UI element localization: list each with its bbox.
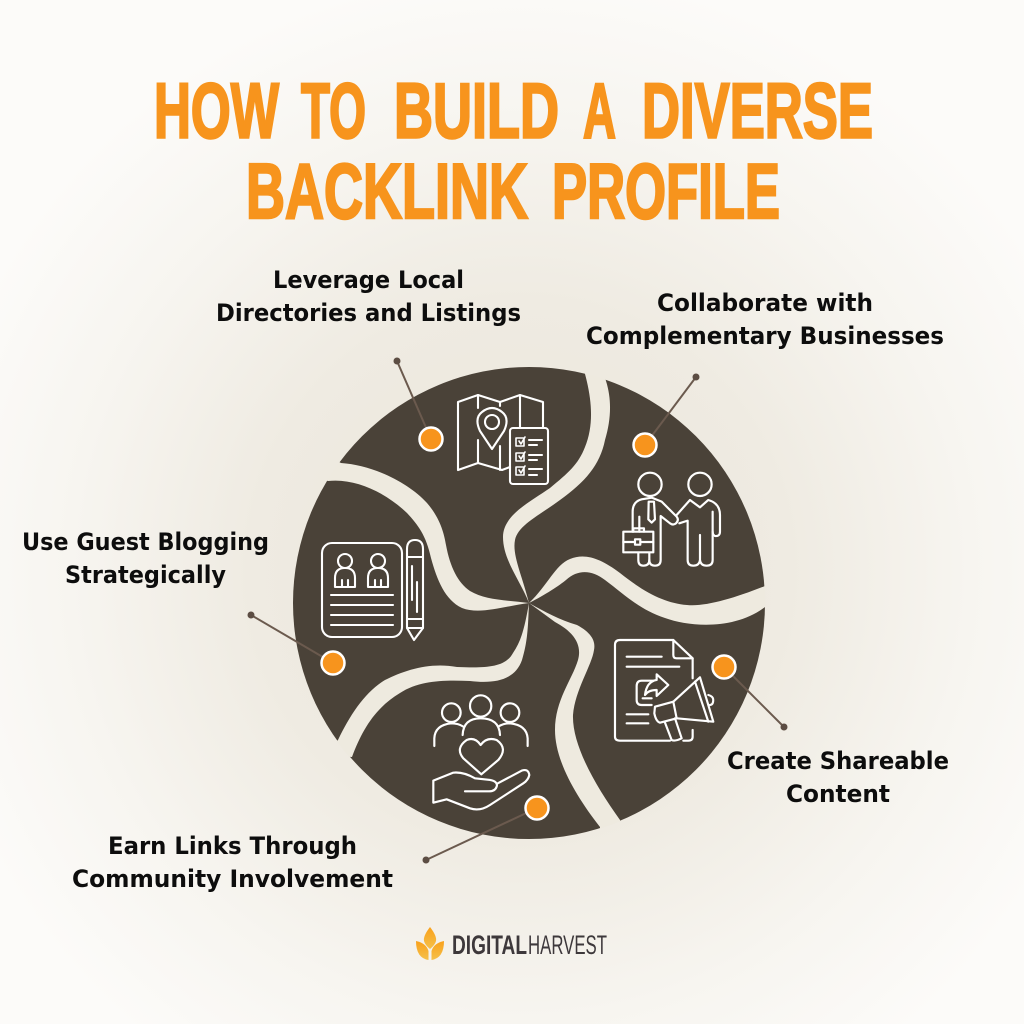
logo: Digital Harvest: DIGITAL <box>452 930 527 960</box>
callout: shareable content: Content <box>786 780 890 808</box>
callout: local directories: Leverage Local <box>273 266 464 294</box>
logo: Digital Harvest <box>416 927 607 960</box>
title <box>154 66 873 235</box>
callout: complementary businesses: Collaborate with <box>657 289 873 317</box>
callout: local directories <box>216 266 521 450</box>
icon: business handshake <box>623 473 720 566</box>
swirl circle diagram <box>293 360 780 845</box>
title: PROFILE <box>552 147 780 235</box>
callout: community involvement <box>72 796 548 893</box>
title: DIVERSE <box>642 66 873 154</box>
icon: document and megaphone <box>615 640 713 741</box>
callout: guest blogging <box>22 528 344 674</box>
logo: Digital Harvest: HARVEST <box>528 930 607 960</box>
icon: community heart in hand <box>433 695 529 809</box>
callout: shareable content: Create Shareable <box>727 747 949 775</box>
title: BACKLINK <box>246 147 528 235</box>
title: BUILD <box>394 66 559 154</box>
icon: guest blogging page and pencil <box>322 540 423 640</box>
callout: complementary businesses: Complementary Businesses <box>586 322 944 350</box>
callout: guest blogging: Use Guest Blogging <box>22 528 269 556</box>
callout: shareable content <box>712 656 949 808</box>
title: A <box>583 66 616 154</box>
callout: community involvement: Earn Links Through <box>108 832 357 860</box>
title: TO <box>301 66 366 154</box>
icon: map and checklist <box>458 395 548 484</box>
callout: local directories: Directories and Listings <box>216 299 521 327</box>
callout: community involvement: Community Involvement <box>72 865 393 893</box>
callout: guest blogging: Strategically <box>65 561 226 589</box>
title: HOW <box>154 66 279 154</box>
callout: complementary businesses <box>586 289 944 456</box>
